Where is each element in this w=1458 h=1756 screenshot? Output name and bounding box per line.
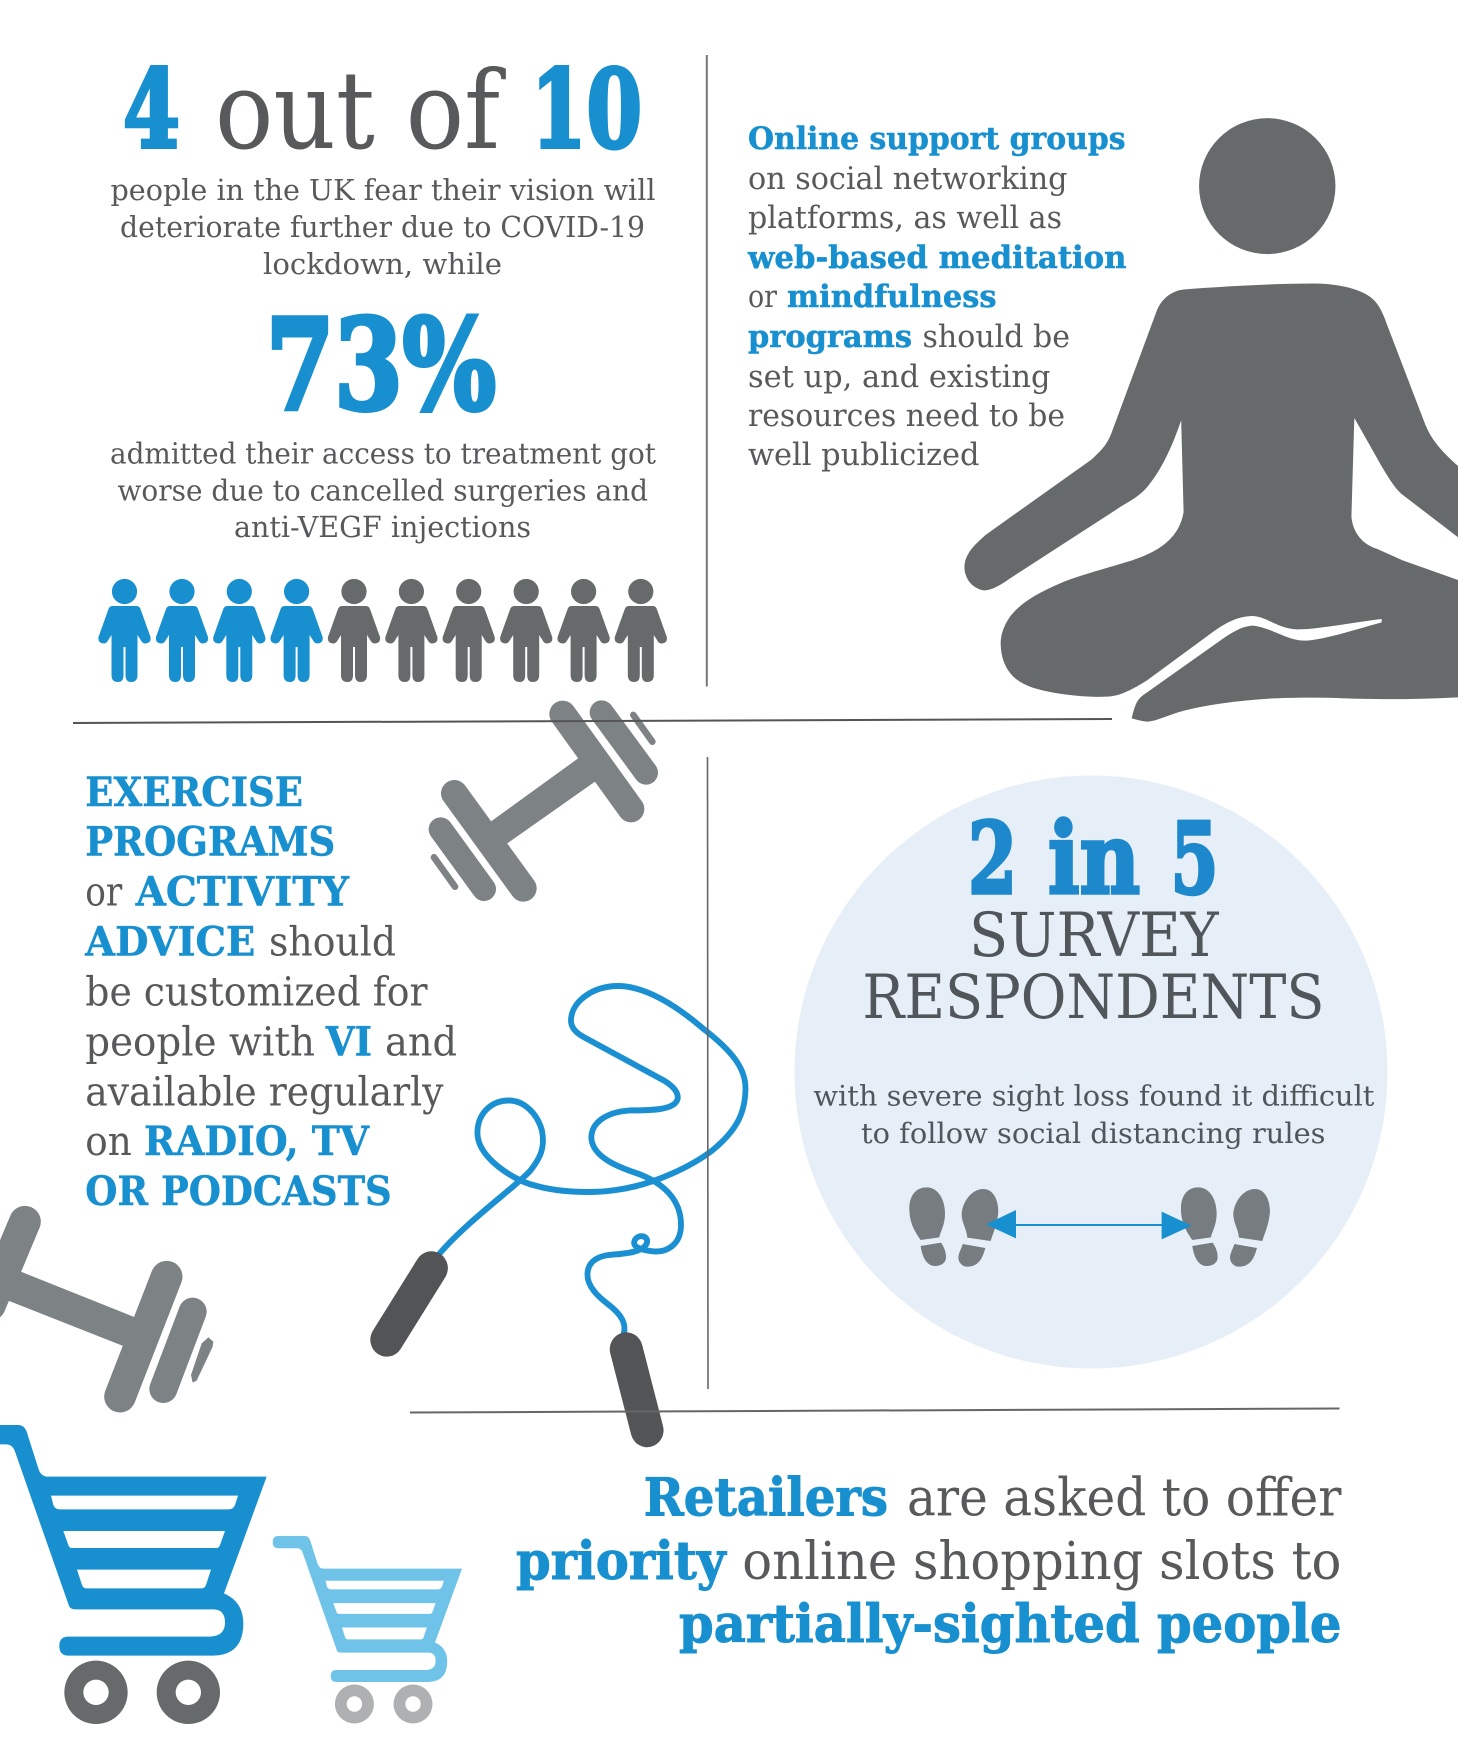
text: exercise programs recommendation: people with bbox=[85, 1020, 315, 1066]
text: online support recommendations: should be bbox=[922, 319, 1070, 355]
panel: online support bbox=[747, 118, 1458, 722]
text: online support recommendations: resources need to be bbox=[748, 398, 1065, 434]
panel: social distancing bbox=[794, 776, 1388, 1368]
text: online support recommendations bbox=[747, 121, 1126, 473]
text: exercise programs recommendation: OR PODCASTS bbox=[85, 1168, 392, 1215]
heading: 2 in 5 bbox=[968, 802, 1218, 917]
panel: vision fear statistics bbox=[98, 47, 667, 682]
text: online support recommendations: programs bbox=[748, 319, 912, 355]
icon row: ten people, four highlighted bbox=[98, 579, 667, 682]
text: online support recommendations: well publicized bbox=[748, 437, 980, 473]
text: people fear vision deterioration: people in the UK fear their vision will bbox=[110, 173, 656, 207]
text: social distancing difficulty bbox=[813, 1080, 1375, 1150]
text: exercise programs recommendation: be customized for bbox=[85, 969, 428, 1015]
text: treatment access: worse due to cancelled surgeries and bbox=[118, 474, 648, 508]
icon: small shopping cart bbox=[273, 1536, 462, 1724]
icon: large shopping cart bbox=[0, 1425, 267, 1724]
text: treatment access: anti-VEGF injections bbox=[234, 510, 531, 544]
text: online support recommendations: platforms, as well as bbox=[748, 200, 1062, 236]
icon: footprints with distance arrow bbox=[909, 1187, 1270, 1267]
text: retailers priority shopping: Retailers bbox=[644, 1468, 888, 1529]
text: exercise programs recommendation: RADIO, TV bbox=[144, 1118, 370, 1165]
text: exercise programs recommendation: ACTIVITY bbox=[135, 868, 349, 915]
text: retailers priority shopping bbox=[516, 1468, 1342, 1655]
text: exercise programs recommendation: or bbox=[85, 869, 123, 915]
text: online support recommendations: Online support groups bbox=[748, 121, 1126, 157]
text: retailers priority shopping: priority bbox=[516, 1531, 727, 1592]
panel: retailers bbox=[0, 1425, 1342, 1724]
circle background bbox=[794, 776, 1388, 1368]
text: people fear vision deterioration: deteriorate further due to COVID-19 bbox=[120, 210, 645, 244]
text: online support recommendations: or bbox=[748, 279, 777, 315]
text: exercise programs recommendation: should bbox=[269, 920, 396, 966]
text: retailers priority shopping: online shopping slots to bbox=[742, 1532, 1341, 1592]
text: people fear vision deterioration: lockdown, while bbox=[263, 247, 502, 281]
text: exercise programs recommendation bbox=[84, 769, 457, 1215]
text: exercise programs recommendation: on bbox=[85, 1119, 132, 1165]
heading: 2 in 5: 5 bbox=[1170, 802, 1218, 917]
text: people fear vision deterioration bbox=[110, 173, 656, 281]
text: exercise programs recommendation: VI bbox=[325, 1019, 372, 1066]
heading: survey respondents: RESPONDENTS bbox=[862, 962, 1325, 1033]
icon: skipping rope bbox=[387, 986, 745, 1430]
text: exercise programs recommendation: EXERCISE bbox=[85, 769, 303, 816]
text: treatment access: admitted their access to treatment got bbox=[110, 436, 656, 470]
heading: 4 out of 10: 10 bbox=[531, 47, 642, 173]
heading: 2 in 5: 2 bbox=[968, 802, 1017, 917]
text: social distancing difficulty: with severe sight loss found it difficult bbox=[813, 1080, 1375, 1113]
text: online support recommendations: web-based meditation bbox=[747, 240, 1126, 276]
heading: 4 out of 10: 4 bbox=[123, 47, 180, 173]
text: online support recommendations: mindfulness bbox=[787, 279, 996, 315]
text: exercise programs recommendation: PROGRAMS bbox=[85, 819, 335, 866]
text: online support recommendations: on social networking bbox=[748, 161, 1068, 197]
icon: lower dumbbell bbox=[0, 1222, 213, 1397]
text: social distancing difficulty: to follow social distancing rules bbox=[861, 1117, 1326, 1150]
heading: survey respondents: SURVEY bbox=[969, 900, 1219, 971]
heading: 4 out of 10 bbox=[123, 47, 642, 174]
heading: survey respondents bbox=[862, 900, 1325, 1033]
heading: 2 in 5: in bbox=[1048, 802, 1140, 917]
text: retailers priority shopping: partially-sighted people bbox=[679, 1594, 1341, 1655]
text: exercise programs recommendation: ADVICE bbox=[84, 919, 255, 966]
panel: exercise advice bbox=[0, 712, 745, 1430]
heading: 73%: 73% bbox=[266, 292, 496, 438]
text: exercise programs recommendation: and bbox=[385, 1020, 457, 1066]
text: retailers priority shopping: are asked to offer bbox=[907, 1469, 1342, 1529]
text: treatment access bbox=[110, 436, 656, 544]
icon: upper dumbbell bbox=[434, 712, 652, 889]
heading: 4 out of 10: out of bbox=[215, 49, 506, 174]
text: exercise programs recommendation: available regularly bbox=[85, 1069, 444, 1115]
text: online support recommendations: set up, and existing bbox=[748, 359, 1050, 395]
icon: meditating figure bbox=[964, 118, 1458, 722]
